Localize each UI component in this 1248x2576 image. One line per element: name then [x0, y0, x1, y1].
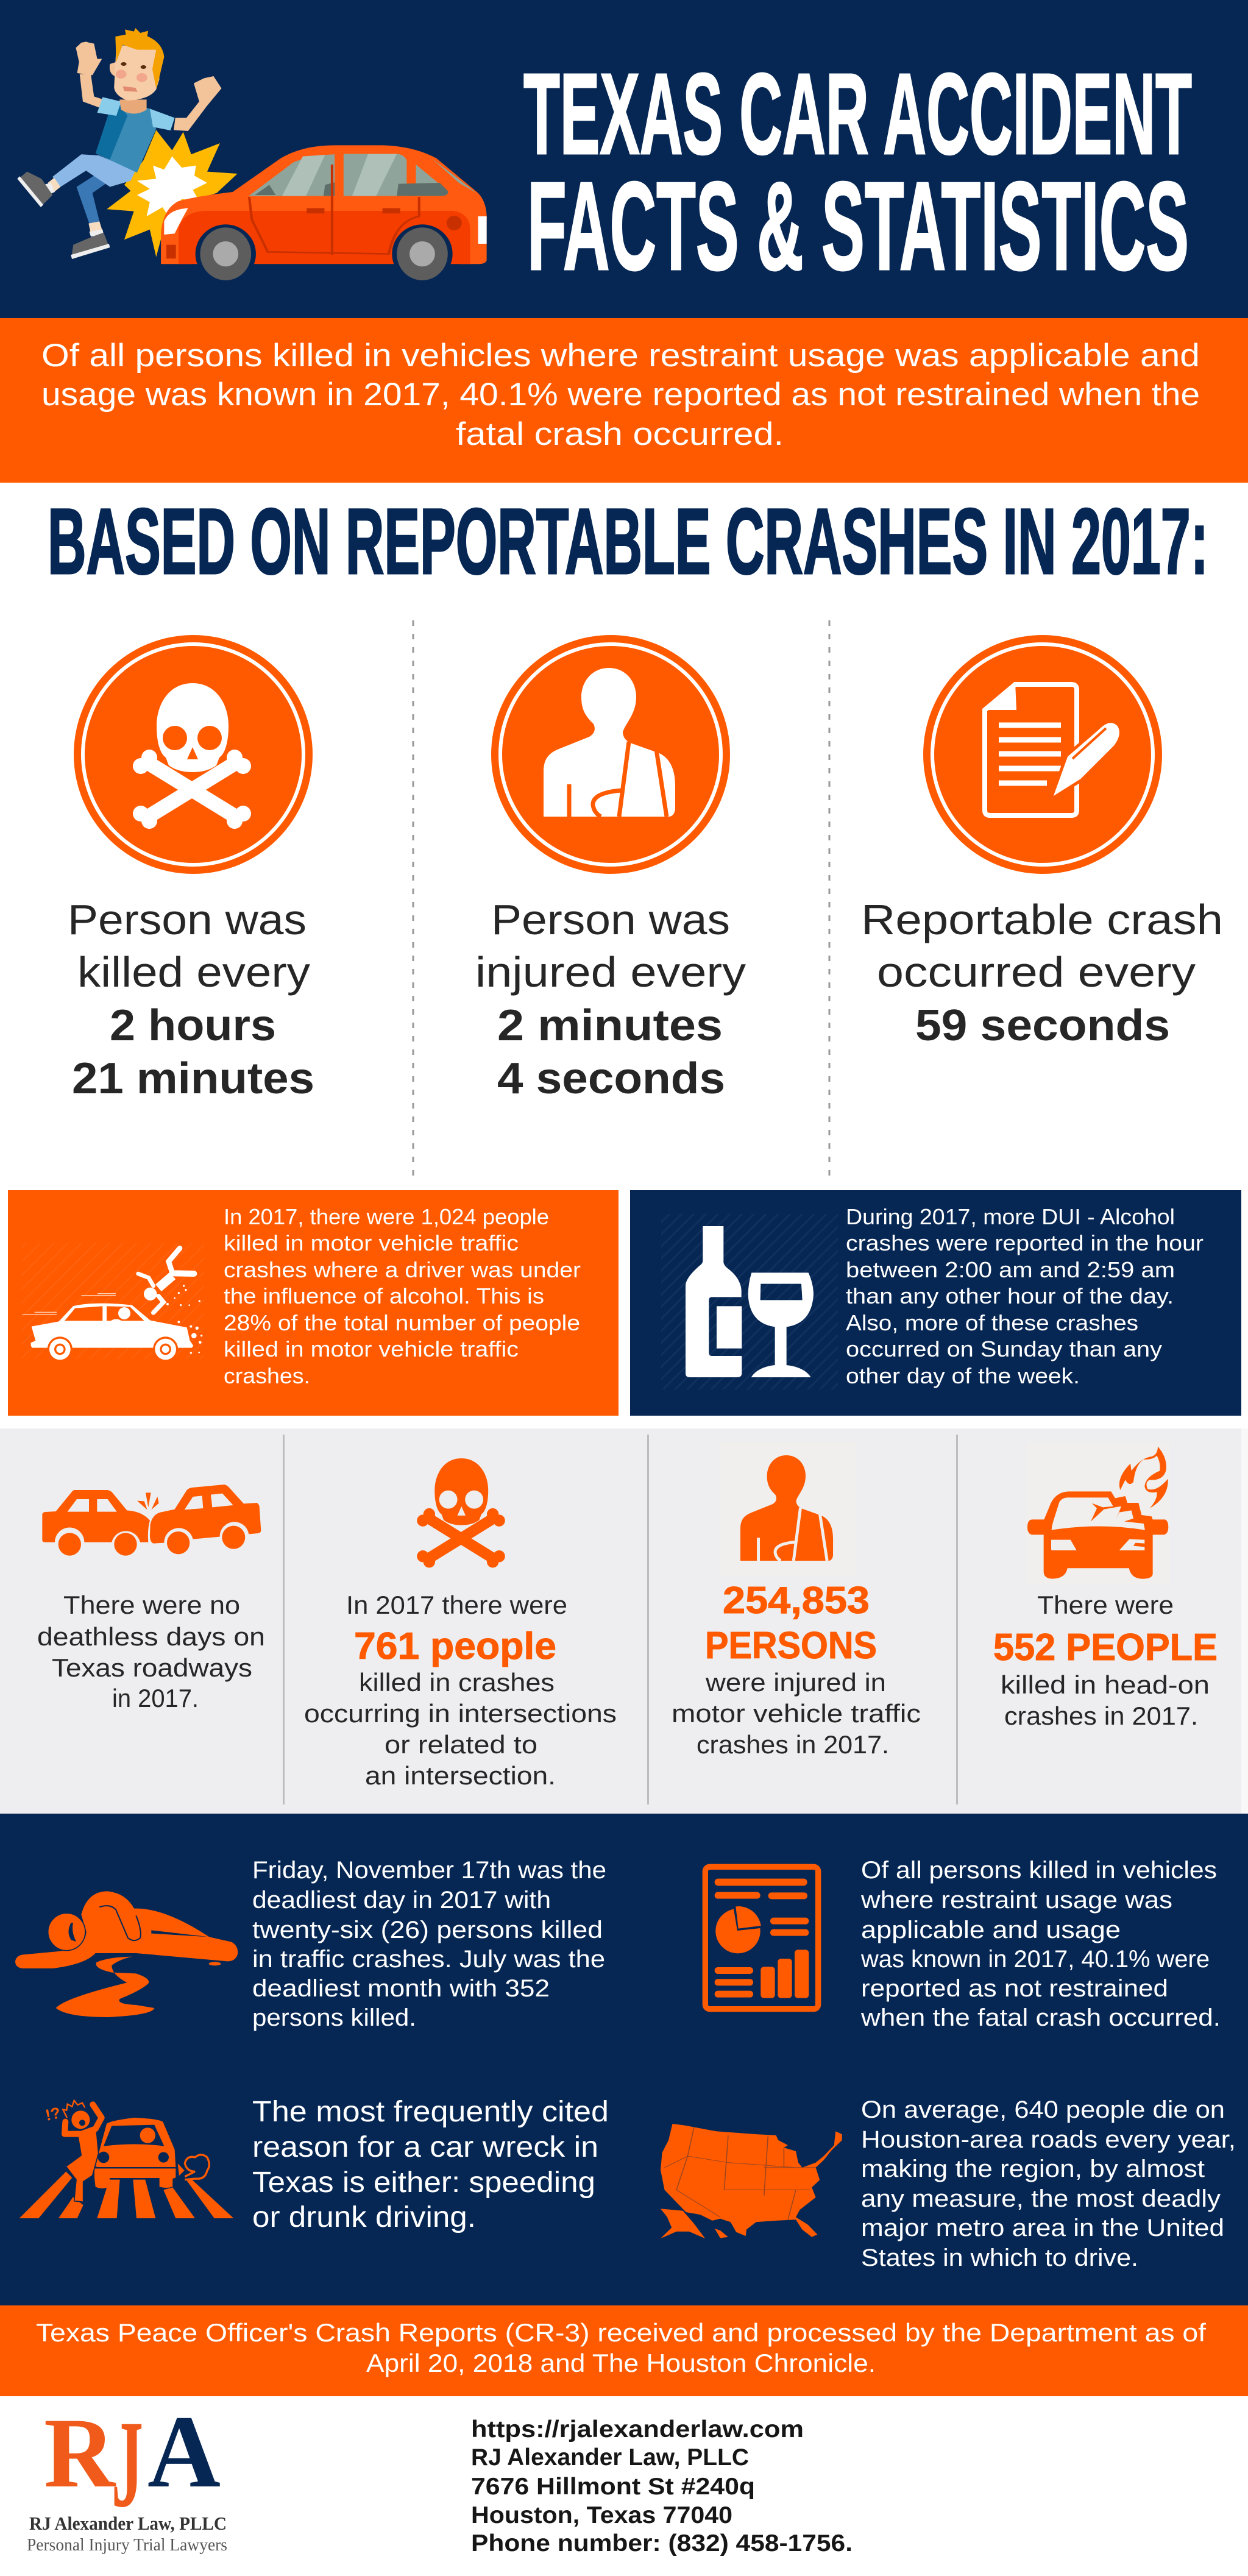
- text: Houston roads: On average, 640 people die on: [861, 2096, 1225, 2123]
- panel: alcohol fatalities: [8, 1190, 619, 1416]
- text: 761 people: an intersection.: [365, 1761, 556, 1790]
- logo: RJ Alexander Law: [27, 2394, 227, 2555]
- contact details: https://rjalexanderlaw.com: [471, 2416, 804, 2443]
- text: deathless days: There were no: [63, 1591, 240, 1619]
- intro text: [41, 338, 1200, 452]
- text: 761 people: occurring in intersections: [304, 1699, 617, 1728]
- text: DUI timing: Also, more of these crashes: [846, 1310, 1138, 1335]
- text: DUI timing: other day of the week.: [846, 1363, 1080, 1388]
- panel: killed stat: [68, 635, 314, 1103]
- text: reportable crash every: Reportable crash: [861, 896, 1223, 943]
- text: deathless days: in 2017.: [112, 1684, 199, 1712]
- text: restraint usage: [860, 1857, 1221, 2031]
- contact details: Houston, Texas 77040: [471, 2502, 732, 2528]
- fact: Houston roads: [661, 2096, 1236, 2271]
- text: 254,853 persons: [672, 1580, 921, 1759]
- icon: injured person in circle: [491, 635, 730, 874]
- text: sources: [36, 2318, 1206, 2377]
- illustration: man hit by car: [17, 28, 487, 286]
- intro text: usage was known in 2017, 40.1% were reported as not restrained when the: [41, 377, 1200, 413]
- text: injured every: 2 minutes: [497, 1001, 723, 1050]
- logo: RJ Alexander Law: Personal Injury Trial Lawyers: [27, 2536, 227, 2555]
- text: alcohol fatalities: crashes where a driver was under: [224, 1257, 581, 1282]
- text: sources: Texas Peace Officer's Crash Reports (CR-3) received and processed by the Department as of: [36, 2318, 1206, 2347]
- impact burst: [107, 130, 238, 257]
- text: deadliest day: persons killed.: [252, 2004, 416, 2031]
- text: killed every: [68, 896, 314, 1103]
- text: 254,853 persons: crashes in 2017.: [697, 1730, 889, 1759]
- panel: injured stat: [475, 635, 746, 1103]
- stat: 254,853 persons: [672, 1442, 921, 1759]
- text: killed every: Person was: [68, 896, 307, 943]
- text: killed every: killed every: [77, 948, 310, 996]
- text: 761 people: [304, 1591, 617, 1790]
- panel: orange intro banner: [0, 318, 1248, 483]
- icon: orange injured person: [740, 1455, 833, 1561]
- text: deadliest day: twenty-six (26) persons killed: [252, 1917, 603, 1943]
- icon: burning car: [1027, 1446, 1168, 1579]
- text: Houston roads: Houston-area roads every year,: [861, 2126, 1236, 2153]
- text: 761 people: killed in crashes: [359, 1668, 555, 1697]
- text: injured every: 4 seconds: [497, 1054, 725, 1103]
- stat: 761 people: [304, 1458, 617, 1790]
- icon: orange skull: [417, 1458, 505, 1567]
- icon: two cars colliding: [42, 1485, 261, 1556]
- text: restraint usage: reported as not restrained: [861, 1975, 1168, 2002]
- text: 761 people: or related to: [385, 1730, 537, 1759]
- text: frequently cited reason: [252, 2096, 609, 2234]
- text: DUI timing: occurred on Sunday than any: [846, 1336, 1162, 1361]
- text: frequently cited reason: Texas is either: speeding: [252, 2166, 595, 2199]
- text: DUI timing: During 2017, more DUI - Alcohol: [846, 1204, 1175, 1229]
- text: alcohol fatalities: [224, 1204, 581, 1388]
- contact details: 7676 Hillmont St #240q: [471, 2474, 755, 2500]
- text: 761 people: 761 people: [354, 1625, 556, 1667]
- logo: RJ Alexander Law: RJ Alexander Law, PLLC: [29, 2513, 227, 2534]
- panel: sources banner: [0, 2305, 1248, 2396]
- text: deathless days: Texas roadways: [52, 1653, 252, 1682]
- icon: report and pen in circle: [923, 635, 1162, 874]
- text: DUI timing: crashes were reported in the hour: [846, 1230, 1204, 1255]
- logo: RJ Alexander Law: A: [147, 2394, 221, 2509]
- text: frequently cited reason: The most frequently cited: [252, 2096, 609, 2128]
- text: injured every: injured every: [475, 948, 746, 996]
- panel: gray statistics band: [0, 1428, 1248, 1814]
- text: 254,853 persons: 254,853: [723, 1580, 870, 1622]
- text: 552 people: There were: [1037, 1591, 1174, 1619]
- text: reportable crash every: occurred every: [877, 948, 1196, 996]
- contact details: RJ Alexander Law, PLLC: [471, 2444, 749, 2471]
- text: injured every: [475, 896, 746, 1103]
- text: Houston roads: States in which to drive.: [861, 2244, 1138, 2271]
- icon: person lying in blood: [15, 1891, 238, 2017]
- icon: car hitting pedestrian on crosswalk: [20, 2101, 233, 2218]
- panel: DUI timing: [630, 1190, 1241, 1416]
- text: Houston roads: [861, 2096, 1236, 2271]
- car: [161, 145, 487, 264]
- text: deathless days: deathless days on: [37, 1622, 265, 1651]
- text: 254,853 persons: PERSONS: [705, 1625, 877, 1667]
- text: 552 people: crashes in 2017.: [1004, 1701, 1198, 1730]
- text: restraint usage: where restraint usage was: [860, 1887, 1172, 1914]
- text: reportable crash every: [861, 896, 1223, 1050]
- text: 552 people: [993, 1591, 1218, 1730]
- text: DUI timing: [846, 1204, 1204, 1388]
- stat: deathless days: [37, 1485, 265, 1712]
- text: alcohol fatalities: killed in motor vehicle traffic: [224, 1336, 519, 1361]
- text: sources: April 20, 2018 and The Houston Chronicle.: [366, 2349, 876, 2377]
- title: [523, 50, 1192, 296]
- text: injured every: Person was: [491, 896, 730, 943]
- text: alcohol fatalities: In 2017, there were 1,024 people: [224, 1204, 549, 1229]
- text: restraint usage: was known in 2017, 40.1% were: [860, 1946, 1210, 1973]
- text: deadliest day: in traffic crashes. July was the: [252, 1946, 605, 1973]
- fact: restraint usage: [705, 1857, 1221, 2031]
- text: deadliest day: deadliest month with 352: [252, 1975, 550, 2002]
- text: deathless days: [37, 1591, 265, 1712]
- icon: skull in circle: [74, 635, 313, 874]
- panel: header: [0, 0, 1248, 318]
- text: 552 people: killed in head-on: [1001, 1670, 1210, 1699]
- panel: reportable crash stat: [861, 635, 1223, 1050]
- text: restraint usage: when the fatal crash occurred.: [860, 2004, 1221, 2031]
- text: 254,853 persons: were injured in: [705, 1668, 886, 1697]
- intro text: Of all persons killed in vehicles where restraint usage was applicable and: [41, 338, 1200, 374]
- text: DUI timing: than any other hour of the day.: [846, 1283, 1174, 1308]
- text: deadliest day: Friday, November 17th was the: [252, 1857, 606, 1884]
- text: DUI timing: between 2:00 am and 2:59 am: [846, 1257, 1175, 1282]
- text: frequently cited reason: or drunk driving.: [252, 2201, 476, 2234]
- text: alcohol fatalities: crashes.: [224, 1363, 310, 1388]
- text: restraint usage: applicable and usage: [861, 1917, 1121, 1943]
- text: alcohol fatalities: killed in motor vehicle traffic: [224, 1230, 519, 1255]
- text: killed every: 21 minutes: [72, 1054, 314, 1103]
- icon: car hitting pedestrian on crosswalk: !?: [44, 2103, 62, 2124]
- logo: RJ Alexander Law: R: [44, 2398, 116, 2508]
- icon: report with charts: [705, 1867, 818, 2009]
- text: frequently cited reason: reason for a car wreck in: [252, 2131, 598, 2163]
- text: deadliest day: deadliest day in 2017 with: [252, 1887, 551, 1914]
- text: 761 people: In 2017 there were: [346, 1591, 567, 1619]
- icon: car hitting pedestrian: [23, 1248, 202, 1362]
- text: Houston roads: major metro area in the United: [861, 2215, 1224, 2241]
- text: killed every: 2 hours: [110, 1001, 276, 1050]
- text: 552 people: 552 PEOPLE: [993, 1627, 1218, 1669]
- stat: 552 people: [993, 1442, 1218, 1730]
- text: restraint usage: Of all persons killed in vehicles: [861, 1857, 1217, 1884]
- fact: deadliest day: [15, 1857, 606, 2031]
- text: Houston roads: making the region, by almost: [861, 2156, 1205, 2182]
- text: alcohol fatalities: the influence of alcohol. This is: [224, 1283, 544, 1308]
- fact: frequently cited reason: [20, 2096, 609, 2234]
- text: Houston roads: any measure, the most deadly: [861, 2185, 1221, 2212]
- icon: map of the United States: [661, 2124, 842, 2238]
- text: reportable crash every: 59 seconds: [915, 1001, 1170, 1050]
- contact details: [471, 2416, 853, 2556]
- contact details: Phone number: (832) 458-1756.: [471, 2530, 853, 2556]
- text: deadliest day: [252, 1857, 606, 2031]
- intro text: fatal crash occurred.: [456, 416, 784, 452]
- icon: bottle and wine glass: [686, 1226, 814, 1377]
- text: alcohol fatalities: 28% of the total number of people: [224, 1310, 580, 1335]
- panel: navy facts: [0, 1814, 1248, 2305]
- logo: RJ Alexander Law: J: [112, 2395, 143, 2533]
- text: 254,853 persons: motor vehicle traffic: [672, 1699, 921, 1728]
